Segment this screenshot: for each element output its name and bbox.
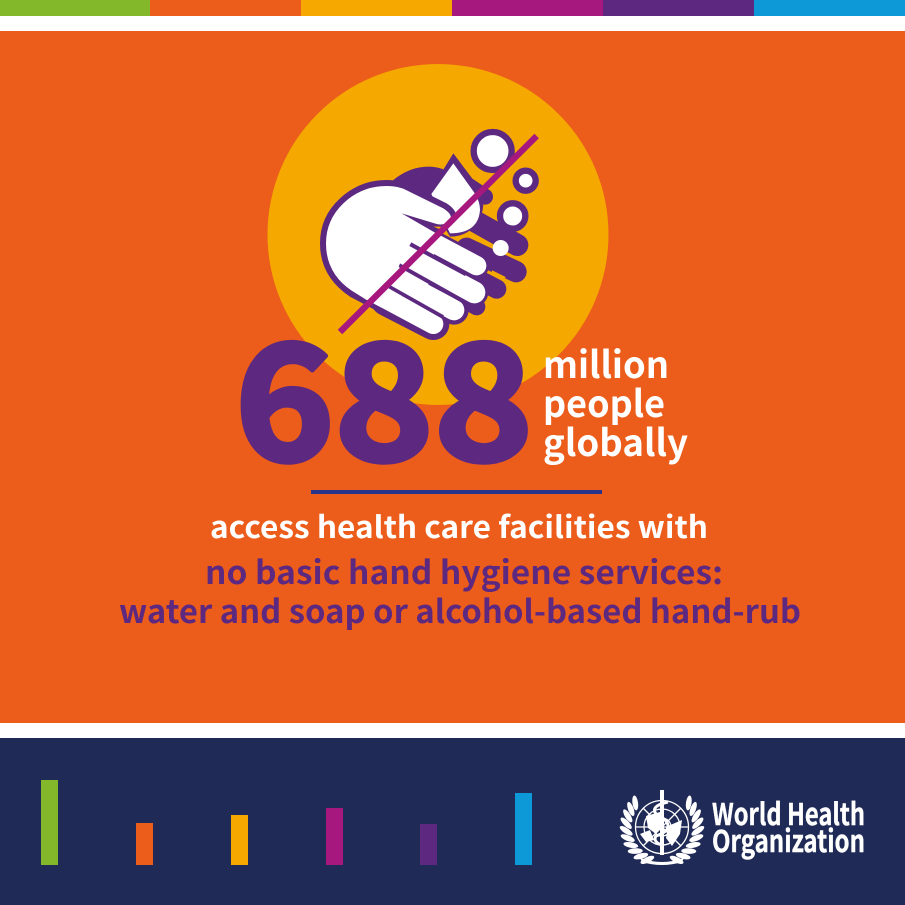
icon: crossed-out hand washing: [320, 132, 537, 338]
text: access health care facilities with: access health care facilities with: [210, 503, 708, 547]
wordmark: [712, 790, 865, 861]
soap drop: [427, 153, 483, 237]
text: no basic hand hygiene services: no basic hand hygiene services:: [205, 548, 723, 594]
top colour strip: [0, 0, 905, 16]
back hand: [393, 167, 517, 307]
gap between back fingers: [470, 235, 505, 278]
crossing slash: [340, 136, 537, 332]
front hand white: [326, 186, 451, 300]
WHO logo: [618, 790, 865, 866]
big number 688: 688: [235, 275, 533, 507]
laurel stems: [640, 858, 684, 865]
wordmark: World Health: [712, 790, 865, 834]
divider line: [311, 490, 602, 494]
panel: navy footer: [0, 738, 905, 905]
emblem: [618, 790, 706, 866]
continents: [640, 812, 682, 846]
front hand outline: [387, 243, 477, 324]
soap bubbles: [474, 132, 536, 256]
text: million people globally: million: [543, 335, 669, 389]
laurel leaves: [618, 795, 706, 866]
text: million people globally: [543, 335, 688, 467]
text: million people globally: globally: [543, 413, 688, 467]
yellow circle: [268, 64, 608, 405]
globe: [636, 800, 688, 854]
footer bar chart: [41, 780, 532, 865]
finger separators: [389, 213, 467, 319]
text: water and soap or alcohol-based hand-rub: water and soap or alcohol-based hand-rub: [119, 587, 801, 633]
staff and serpent: [660, 790, 664, 855]
panel: orange main: [0, 31, 905, 723]
wordmark: Organization: [712, 817, 865, 861]
text: million people globally: people: [543, 374, 665, 428]
